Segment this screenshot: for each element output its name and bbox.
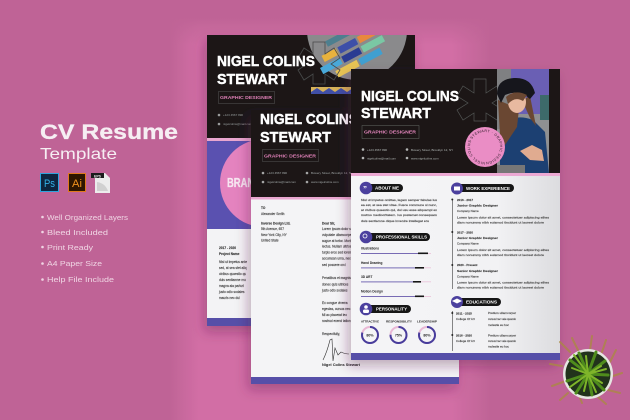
section: educations: 2016 - 2020 xyxy=(456,334,472,338)
section: personality: 80% xyxy=(423,333,431,337)
section: professional skills: Motion Design xyxy=(361,290,383,294)
letter body: accumsan urna, nec xyxy=(322,256,351,260)
section: work experience xyxy=(451,182,550,290)
section: about me: ABOUT ME xyxy=(375,186,399,191)
letter body: Ex congue viverra xyxy=(322,301,348,305)
section: work experience: diam nonummy nibh euismod tincidunt ut laoreet dolore xyxy=(457,286,544,290)
letter body: justo odio sodales xyxy=(321,288,348,292)
section: personality: LEADERSHIP xyxy=(417,320,437,324)
letter body: vulputate ullamcorper xyxy=(322,233,353,237)
section: work experience: Lorem ipsum dolor sit amet, consectetuer adipiscing elites xyxy=(457,216,550,220)
section: about me: mutmo mediocritatem. Ius postemet consequam xyxy=(361,213,438,217)
section: educations: Pretium ullamcorper xyxy=(488,334,516,338)
letter address: 5th Avenue, 657 xyxy=(261,227,284,231)
section: work experience: 2016 - 2017 xyxy=(457,198,473,202)
section: educations: College Of Art xyxy=(456,339,475,343)
letter body: egestas, cursus nec xyxy=(322,307,351,311)
letter body: Penatibus et magnis xyxy=(322,276,351,280)
feature list: Bleed Included xyxy=(47,228,108,237)
letter body: Respectfully, xyxy=(322,332,340,336)
section: work experience: diam nonummy nibh euismod tincidunt ut laoreet dolore xyxy=(457,220,544,224)
icon: EPS file xyxy=(91,173,110,193)
letter address: United State xyxy=(261,238,279,242)
letter body: nostrud exerci tation xyxy=(322,319,351,323)
letter address: Inverse Design Ltd. xyxy=(261,222,291,226)
title block xyxy=(40,121,178,163)
front footer bar xyxy=(351,353,560,360)
skill bars xyxy=(361,252,431,297)
back page purple banner xyxy=(207,141,415,229)
middle letter page: www.nigelcolins.com xyxy=(311,180,339,184)
section: about me: at civibus quaestio qui, dui usu esse aliquampl ex xyxy=(361,208,438,212)
section: about me: Nisi ut impetus omittas, legam semper fabulas ius xyxy=(361,198,438,202)
back page text: Project Name xyxy=(219,252,240,256)
front header xyxy=(351,69,560,176)
section: educations: Pretium ullamcorper xyxy=(488,311,516,315)
middle letter page: nigelcolins@mail.com xyxy=(267,180,297,184)
feature list xyxy=(41,213,128,284)
section: about me: duis sentiamne dique invenire intellegat eru xyxy=(361,219,429,223)
middle page name: STEWART xyxy=(260,130,331,146)
front resume page xyxy=(340,69,562,374)
letter body: sed posuere orci xyxy=(322,263,346,267)
icon: Photoshop xyxy=(40,174,58,192)
progress rings xyxy=(362,327,435,343)
middle letter page: +123 4567 890 xyxy=(267,171,287,175)
middle letter page: Nigel Colins Stewart xyxy=(322,363,361,367)
section: professional skills xyxy=(360,231,431,297)
section: work experience: 2017 - 2020 xyxy=(457,230,473,234)
section: educations: molestie eu hoc xyxy=(488,344,509,348)
section: personality: RESPONSIBILITY xyxy=(386,320,412,324)
icon: Photoshop: Ps xyxy=(44,178,55,190)
title: CV Resume: CV Resume xyxy=(40,121,178,144)
contact details: nigelcolins@mail.com xyxy=(367,156,397,160)
section: educations: College Of Art xyxy=(456,317,475,321)
section: work experience: Company Name xyxy=(457,242,479,246)
letter body: Lorem ipsum dolor sit amet xyxy=(322,227,361,231)
job title box xyxy=(362,126,419,138)
section: professional skills: PROFESSIONAL SKILLS xyxy=(376,235,427,240)
letter address: Alexander Smith xyxy=(261,212,285,216)
section: educations: 2011 - 2015 xyxy=(456,312,472,316)
star outline xyxy=(457,79,503,121)
section: work experience: Junior Graphic Designer xyxy=(457,204,499,208)
section: work experience: Junior Graphic Designer xyxy=(457,236,499,240)
middle page name xyxy=(260,112,358,146)
back page text: Nisi ut impetus ante xyxy=(219,260,247,264)
letter body: augue at tortor. Morbi xyxy=(322,239,353,243)
letter body xyxy=(321,222,361,336)
feature list: A4 Paper Size xyxy=(47,259,102,268)
job title box: GRAPHIC DESIGNER xyxy=(364,130,417,136)
letter body: Mi ac placerat leo xyxy=(322,313,347,317)
section: personality: ATTRACTIVE xyxy=(361,320,379,324)
name xyxy=(361,89,459,122)
portrait photo xyxy=(497,69,549,173)
section: professional skills: Illustrations xyxy=(361,246,379,250)
back resume page: BRAND xyxy=(227,176,261,190)
middle letter page: GRAPHIC DESIGNER xyxy=(264,154,317,160)
feature list: Print Ready xyxy=(47,243,93,252)
section: about me: ea est, at sea stet vitae. Fusce commune si nunc, xyxy=(361,203,437,207)
back page text: magna ala parturi xyxy=(219,284,244,288)
section: work experience: Lorem ipsum dolor sit amet, consectetuer adipiscing elites xyxy=(457,280,550,284)
section: personality xyxy=(360,303,437,343)
letter address: New York City, NY xyxy=(261,233,288,237)
pink name badge: NIGEL COLINS STEWART · GRAPHIC DESIGNER · xyxy=(468,130,502,164)
section: work experience: WORK EXPERIENCE xyxy=(466,186,510,191)
section: about me xyxy=(360,182,438,223)
letter address xyxy=(261,206,291,242)
letter body: Dear Sir, xyxy=(322,222,335,226)
section: educations: cursus hac vale quando xyxy=(488,317,516,321)
middle letter page xyxy=(251,110,459,384)
section: professional skills: 3D ART xyxy=(361,275,372,279)
back page name: STEWART xyxy=(217,72,287,88)
section: about me: ” xyxy=(363,185,367,194)
back page text xyxy=(218,246,247,300)
name: NIGEL COLINS xyxy=(361,89,459,105)
icon: EPS file: EPS xyxy=(94,174,102,178)
back resume page: nigelcolins@mail.com xyxy=(223,122,253,126)
feature list: Help File Include xyxy=(47,275,114,284)
letter footer bar xyxy=(251,377,459,384)
letter body: lectus. Nullam ultrices xyxy=(322,244,353,248)
section: work experience: Senior Graphic Designer xyxy=(457,269,499,273)
section: work experience: diam nonummy nibh euismod tincidunt ut laoreet dolore xyxy=(457,253,544,257)
contact details xyxy=(362,148,453,160)
section: educations: molestie eu hoc xyxy=(488,323,509,327)
middle page name: NIGEL COLINS xyxy=(260,112,358,128)
signature xyxy=(323,339,349,361)
pink name badge xyxy=(465,127,505,167)
section: work experience: Lorem ipsum dolor sit amet, consectetuer adipiscing elites xyxy=(457,248,550,252)
letter body: donec quis ultrices xyxy=(322,282,349,286)
name: STEWART xyxy=(361,106,431,122)
section: work experience: 2020 - Present xyxy=(457,263,477,267)
section: educations: EDUCATIONS xyxy=(466,300,497,305)
subtitle: Template: Template xyxy=(40,146,117,163)
section: work experience: Company Name xyxy=(457,274,479,278)
section: personality: 75% xyxy=(395,333,403,337)
contact details: www.nigelcolins.com xyxy=(411,156,439,160)
section: educations: cursus hac vale quando xyxy=(488,339,516,343)
letter body: turpis eros sed lorem xyxy=(322,250,352,254)
back page text: civibus quaestio qu xyxy=(219,272,246,276)
back page text: 2017 - 2020 xyxy=(219,246,236,250)
star outline xyxy=(298,42,340,84)
back page footer bar xyxy=(207,318,415,326)
contact details: +123 4567 890 xyxy=(367,148,387,152)
back page name: NIGEL COLINS xyxy=(217,54,315,70)
back page text: sed, at sea stet aliq xyxy=(219,266,247,270)
icon: Illustrator xyxy=(68,174,86,192)
section: professional skills: Hand Drawing xyxy=(361,261,382,265)
section: personality: PERSONALITY xyxy=(376,307,407,312)
back page text: justo odio sodales xyxy=(218,290,245,294)
potted plant xyxy=(550,336,622,404)
section: work experience: Company Name xyxy=(457,209,479,213)
section: personality: 80% xyxy=(366,333,374,337)
contact details: Bowery Street, Brooklyn 12, NY xyxy=(411,148,453,152)
icon: Illustrator: Ai xyxy=(72,178,82,190)
back page text: duis sentiamne mu xyxy=(219,278,246,282)
back page name xyxy=(217,54,315,88)
section: educations xyxy=(451,296,516,351)
palette photo xyxy=(298,35,407,94)
back resume page: GRAPHIC DESIGNER xyxy=(220,95,273,101)
back resume page xyxy=(207,0,415,326)
back page text: mauris nec dui xyxy=(219,296,240,300)
feature list: Well Organized Layers xyxy=(47,213,128,222)
timeline xyxy=(451,199,454,289)
letter address: TO xyxy=(261,206,266,210)
middle letter page: Bowery Street, Brooklyn 12, NY xyxy=(311,171,353,175)
back resume page: +123 4567 890 xyxy=(223,113,243,117)
